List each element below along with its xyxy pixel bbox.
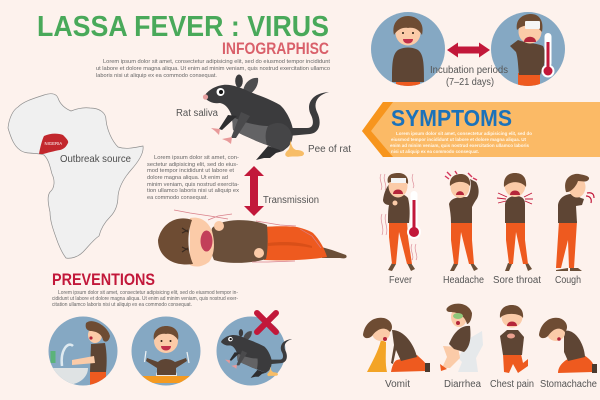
- legs: [389, 221, 412, 264]
- torso: [564, 331, 585, 361]
- shoe: [425, 363, 430, 372]
- rat nose: [203, 94, 208, 100]
- legs: [503, 354, 528, 373]
- heading: symptoms: SYMPTOMS: [391, 105, 512, 131]
- torso: [90, 343, 107, 372]
- transmission text block: [147, 155, 239, 201]
- face: [547, 325, 565, 341]
- figure: headache: [445, 171, 479, 271]
- table: [140, 376, 192, 383]
- utensils: [144, 351, 189, 363]
- hair: [450, 174, 470, 186]
- shoes: [440, 364, 447, 371]
- map: Africa with Nigeria highlighted: [8, 94, 143, 258]
- label: incubation periods: Incubation periods: [430, 65, 508, 76]
- sick green: [453, 313, 463, 319]
- leg crease: [268, 242, 312, 248]
- torso: [505, 196, 525, 223]
- rat eye: [216, 88, 224, 96]
- illustration: patient lying down: [158, 210, 347, 267]
- rat ears: [235, 74, 243, 88]
- icon: avoid rats: [216, 313, 292, 386]
- figure: vomit: [363, 318, 430, 372]
- icon: clean eating: [132, 316, 200, 386]
- mouth: [524, 37, 536, 42]
- legs: [558, 355, 593, 373]
- torso and arms: [146, 358, 187, 375]
- face: [88, 330, 102, 343]
- rat body: [204, 85, 293, 151]
- red cross: [257, 313, 276, 332]
- hair: [539, 318, 567, 338]
- banner background: [362, 102, 600, 157]
- hair: [388, 173, 408, 184]
- mouth: [403, 39, 413, 44]
- face: [372, 325, 390, 341]
- label: transmission: Transmission: [263, 195, 319, 206]
- figure: diarrhea: [440, 304, 483, 372]
- shoes: [450, 263, 478, 271]
- pants: [90, 371, 106, 385]
- shoes: [388, 263, 415, 271]
- mouth: [89, 336, 93, 340]
- closed eyes: [182, 228, 188, 252]
- preventions text block: cididunt ut labore et dolore magna aliqua. Ut enim ad minim veniam, quis nostrud exer-: [52, 296, 238, 302]
- vomit stream: [367, 340, 387, 372]
- torso: [500, 330, 524, 355]
- rat arms: [219, 115, 237, 130]
- face: [504, 173, 526, 197]
- faucet: [62, 345, 73, 366]
- legs: [556, 221, 577, 268]
- intro text block: laboris nisi ut aliquip ex ea commodo consequat.: [96, 73, 217, 79]
- transmission text block: ea commodo consequat.: [147, 195, 208, 201]
- icon: sick person with thermometer: [491, 12, 565, 89]
- preventions text block: citation ullamco laboris nisi ut aliquip ex ea commodo consequat.: [52, 302, 192, 308]
- torso: [392, 48, 424, 82]
- symptoms text block: nisi ut aliquip ex ea commodo consequat.: [391, 149, 479, 155]
- title: LASSA FEVER : VIRUS: [37, 11, 329, 43]
- rat haunch: [266, 123, 292, 150]
- legs: [451, 221, 474, 264]
- shiver lines: [174, 210, 321, 262]
- pain marks: [445, 171, 477, 180]
- hair: [86, 321, 110, 342]
- heading: preventions: PREVENTIONS: [52, 270, 155, 289]
- figure: cough: [556, 174, 594, 271]
- legs: [262, 226, 327, 260]
- arrow: incubation double arrow: [447, 42, 490, 58]
- mouth: [383, 337, 387, 341]
- thermometer: [410, 191, 418, 229]
- label: vomit: Vomit: [385, 379, 410, 390]
- hair: [500, 305, 523, 318]
- intro text block: Lorem ipsum dolor sit amet, consectetur adipisicing elit, sed do eiusmod tempor incididunt: [103, 59, 331, 65]
- open mouth: [200, 230, 212, 252]
- banner chevron: [362, 102, 393, 157]
- neck and face: [190, 218, 214, 267]
- face: [568, 176, 586, 198]
- symptoms text block: enim ad minim veniam, quis nostrud exercitation ullamco laboris: [390, 143, 529, 149]
- label: incubation periods: [430, 65, 508, 88]
- figure: stomachache: [539, 318, 597, 373]
- thermometer: [542, 33, 554, 78]
- torso: [449, 326, 470, 352]
- shoes: [505, 263, 532, 271]
- cough spray: [586, 193, 594, 203]
- icon: healthy person: [371, 12, 445, 90]
- torso and raised arm: [383, 182, 410, 223]
- transmission text block: sectetur adipisicing elit, sed do eius-: [147, 162, 238, 168]
- hair: [393, 16, 423, 35]
- label: diarrhea: Diarrhea: [444, 379, 481, 390]
- torso and arm: [510, 40, 545, 75]
- hair: [154, 326, 178, 340]
- legs: [506, 221, 528, 264]
- label: outbreak source: Outbreak source: [60, 153, 131, 165]
- preventions text block: Lorem ipsum dolor sit amet, consectetur adipisicing elit, sed do eiusmod tempor in-: [58, 290, 238, 296]
- puddle: pee: [285, 140, 304, 157]
- shoes: [556, 268, 582, 271]
- torso and raised arm: [449, 179, 479, 223]
- rat illustration: [203, 74, 329, 160]
- label: incubation periods: (7–21 days): [446, 77, 494, 88]
- face: [518, 26, 542, 44]
- rat hind feet: [256, 146, 283, 160]
- bottle: [50, 351, 56, 363]
- head towel: [525, 21, 540, 29]
- torso and arm: [391, 330, 417, 364]
- mouth: [393, 190, 403, 194]
- small rat: [221, 329, 292, 378]
- transmission text block: mod tempor incididunt ut labore et: [147, 168, 235, 174]
- transmission text block: minim veniam, quis nostrud exercita-: [147, 182, 239, 188]
- cough rays: [497, 193, 533, 204]
- arrow: transmission double arrow: [244, 166, 264, 216]
- label: rat saliva: Rat saliva: [176, 108, 218, 119]
- figure: fever: [380, 173, 421, 271]
- transmission text block: Lorem ipsum dolor sit amet, con-: [154, 155, 239, 161]
- plate: [156, 372, 177, 376]
- rat tail: [288, 92, 329, 136]
- intro text block: ut labore et dolore magna aliqua. Ut enim ad minim veniam, quis nostrud exercitation ullamco: [96, 66, 330, 72]
- legs: [442, 346, 460, 368]
- face: [396, 28, 420, 46]
- subtitle: INFOGRAPHISC: [222, 40, 329, 58]
- label: chest pain: Chest pain: [490, 379, 534, 390]
- label: headache: Headache: [443, 275, 484, 286]
- label: fever: Fever: [389, 275, 413, 286]
- hands: [214, 221, 224, 231]
- face: [451, 307, 467, 327]
- hair: [158, 218, 193, 264]
- Nigeria label: NIGERIA: [44, 141, 62, 146]
- sink: [53, 368, 88, 384]
- symptoms text block: [390, 131, 532, 155]
- pants: [518, 73, 540, 86]
- face: [388, 174, 408, 198]
- face: [502, 306, 522, 328]
- figure: chest pain: [500, 305, 528, 373]
- hair: [446, 304, 472, 324]
- hair: [517, 14, 543, 32]
- label: cough: Cough: [555, 275, 581, 286]
- heat lines: [380, 174, 417, 260]
- banner: symptoms: [362, 102, 600, 157]
- symptoms text block: eiusmod tempor incididunt ut labore et dolore magna aliqua. Ut: [391, 137, 526, 143]
- rat paws: [211, 128, 232, 144]
- shoe: [592, 364, 597, 373]
- mouth: [161, 346, 171, 350]
- rat belly: [232, 116, 268, 145]
- mouth: [456, 321, 460, 325]
- figure: sore throat: [497, 173, 533, 271]
- towel: [391, 178, 406, 183]
- label: sore throat: Sore throat: [493, 275, 541, 286]
- toilet: [458, 331, 483, 372]
- hair: [565, 174, 589, 192]
- label: stomachache: Stomachache: [540, 379, 597, 390]
- hair: [363, 318, 392, 338]
- icon: washing hands: [48, 316, 118, 387]
- arm: [72, 356, 95, 365]
- hands: [507, 334, 515, 338]
- pants: [396, 82, 420, 86]
- hair: [504, 173, 526, 187]
- mouth: [510, 190, 520, 195]
- transmission text block: dolore magna aliqua. Ut enim ad: [147, 175, 228, 181]
- mouth: [456, 191, 464, 195]
- mouth: [557, 337, 561, 341]
- torso and arm: [558, 194, 584, 223]
- transmission text block: tion ullamco laboris nisi ut aliquip ex: [147, 188, 239, 194]
- eyes: [160, 340, 162, 342]
- preventions text block: [52, 290, 238, 308]
- legs: [391, 355, 426, 372]
- label: pee of rat: Pee of rat: [308, 144, 351, 155]
- Nigeria shape: [39, 134, 68, 154]
- eyes: [402, 32, 404, 34]
- symptoms text block: Lorem ipsum dolor sit amet, consectetur adipisicing elit, sed do: [396, 131, 532, 137]
- face: [154, 334, 178, 353]
- shoe: [318, 246, 347, 258]
- face: [450, 176, 470, 198]
- hand on chest: [392, 200, 398, 206]
- torso: [211, 220, 268, 263]
- mouth: [507, 322, 517, 326]
- intro text block: [96, 59, 331, 79]
